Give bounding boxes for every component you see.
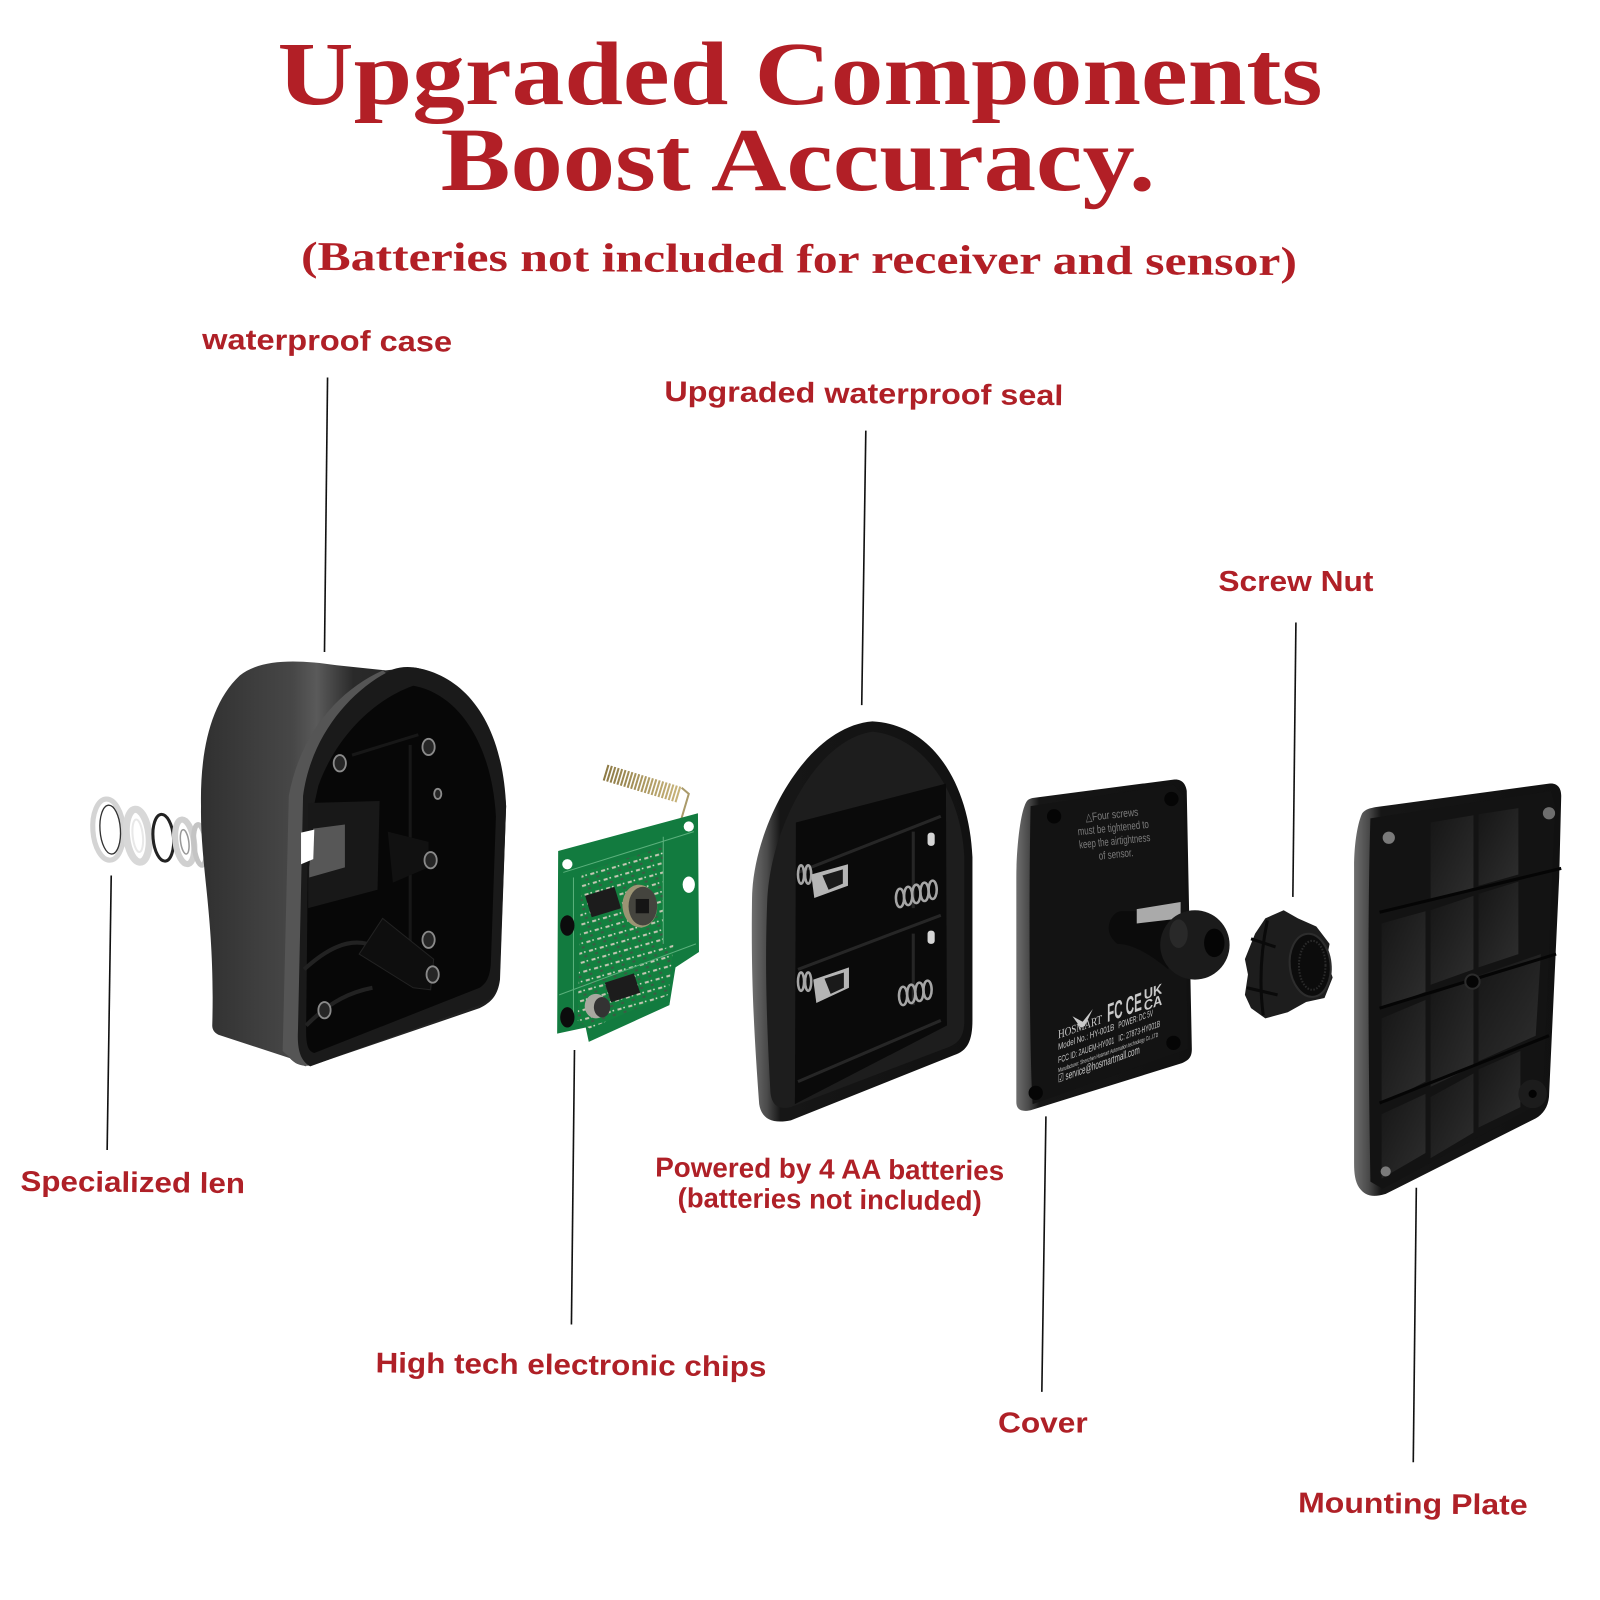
inner ribs [304,943,372,1026]
label: batteries: (batteries not included) [677,1182,982,1216]
subtitle: (Batteries not included for receiver and sensor) [301,234,1297,284]
label: screw nut [1218,566,1374,897]
compartment rib lines [798,816,941,1082]
board holes [562,859,572,869]
product label: POWER: DC 5V [1118,1008,1153,1031]
label: waterproof case [201,324,452,652]
product label: FC CE [1107,986,1142,1028]
warning text: must be tightened to [1077,819,1149,838]
label: mounting plate: Mounting Plate [1298,1487,1528,1522]
center hole [1465,974,1480,989]
ball mount [1109,902,1230,980]
case rim highlight [283,670,393,1066]
board [557,813,699,1042]
case outer shell [201,662,506,1066]
label: upgraded waterproof seal: Upgraded waterproof seal [664,376,1064,412]
warning text [1076,806,1153,865]
screw nut [1245,910,1334,1018]
warning text: of sensor. [1098,847,1134,863]
cover [1016,779,1230,1111]
title: Upgraded Components [278,25,1322,124]
product label: HOSMART [1058,1012,1102,1042]
warning text: △Four screws [1085,807,1139,824]
springs [798,865,937,1005]
mounting plate [1354,784,1561,1196]
label: mounting plate [1298,1188,1528,1522]
icon: lens rings [91,798,208,866]
circuit board [557,772,699,1042]
seal body [752,721,972,1122]
label: specialized lens: Specialized len [20,1166,245,1200]
sensor [620,883,659,929]
antenna spring [605,772,689,832]
label: batteries [655,1152,1004,1216]
contacts [811,864,848,898]
capacitor [585,994,607,1018]
plate screws [1383,832,1395,844]
waterproof seal with battery compartment [752,721,972,1122]
product label: UK [1144,981,1163,1004]
label: cover: Cover [998,1408,1088,1440]
title [278,25,1322,210]
board surface mount parts [578,847,673,1029]
product label: Manufacturer: Shenzhen Hosmart Automation technology Co.,LTD [1058,1032,1158,1074]
label: waterproof case: waterproof case [201,324,452,359]
chips [585,887,621,917]
label: batteries: Powered by 4 AA batteries [655,1152,1004,1186]
label: electronic chips: High tech electronic chips [375,1347,767,1384]
product label: FCC ID: 2AUEM-HY001 [1058,1035,1114,1066]
product label: CA [1144,993,1163,1015]
plate ribs [1380,868,1561,1103]
title: Boost Accuracy. [441,111,1155,210]
warning text: keep the airtightness [1079,832,1151,851]
label: upgraded waterproof seal [664,376,1064,705]
plate body [1354,784,1561,1196]
product label: IC: 27873-HY001B [1118,1019,1160,1044]
product label: ☑ service@hosmartmall.com [1058,1045,1140,1086]
case rim [298,667,506,1066]
product label: Model No.: HY-001B [1058,1022,1114,1053]
battery recess [795,784,947,1104]
screw holes [1047,809,1061,823]
screw posts [318,739,441,1018]
plate cells [1382,808,1541,1179]
window [308,801,380,908]
label: screw nut: Screw Nut [1218,566,1374,598]
label: cover [998,1116,1088,1440]
product label [1058,979,1163,1086]
label: specialized lens [20,876,245,1200]
case cavity [306,686,496,1053]
cover plate [1016,779,1192,1111]
waterproof case [201,662,506,1066]
label: electronic chips [375,1050,767,1384]
